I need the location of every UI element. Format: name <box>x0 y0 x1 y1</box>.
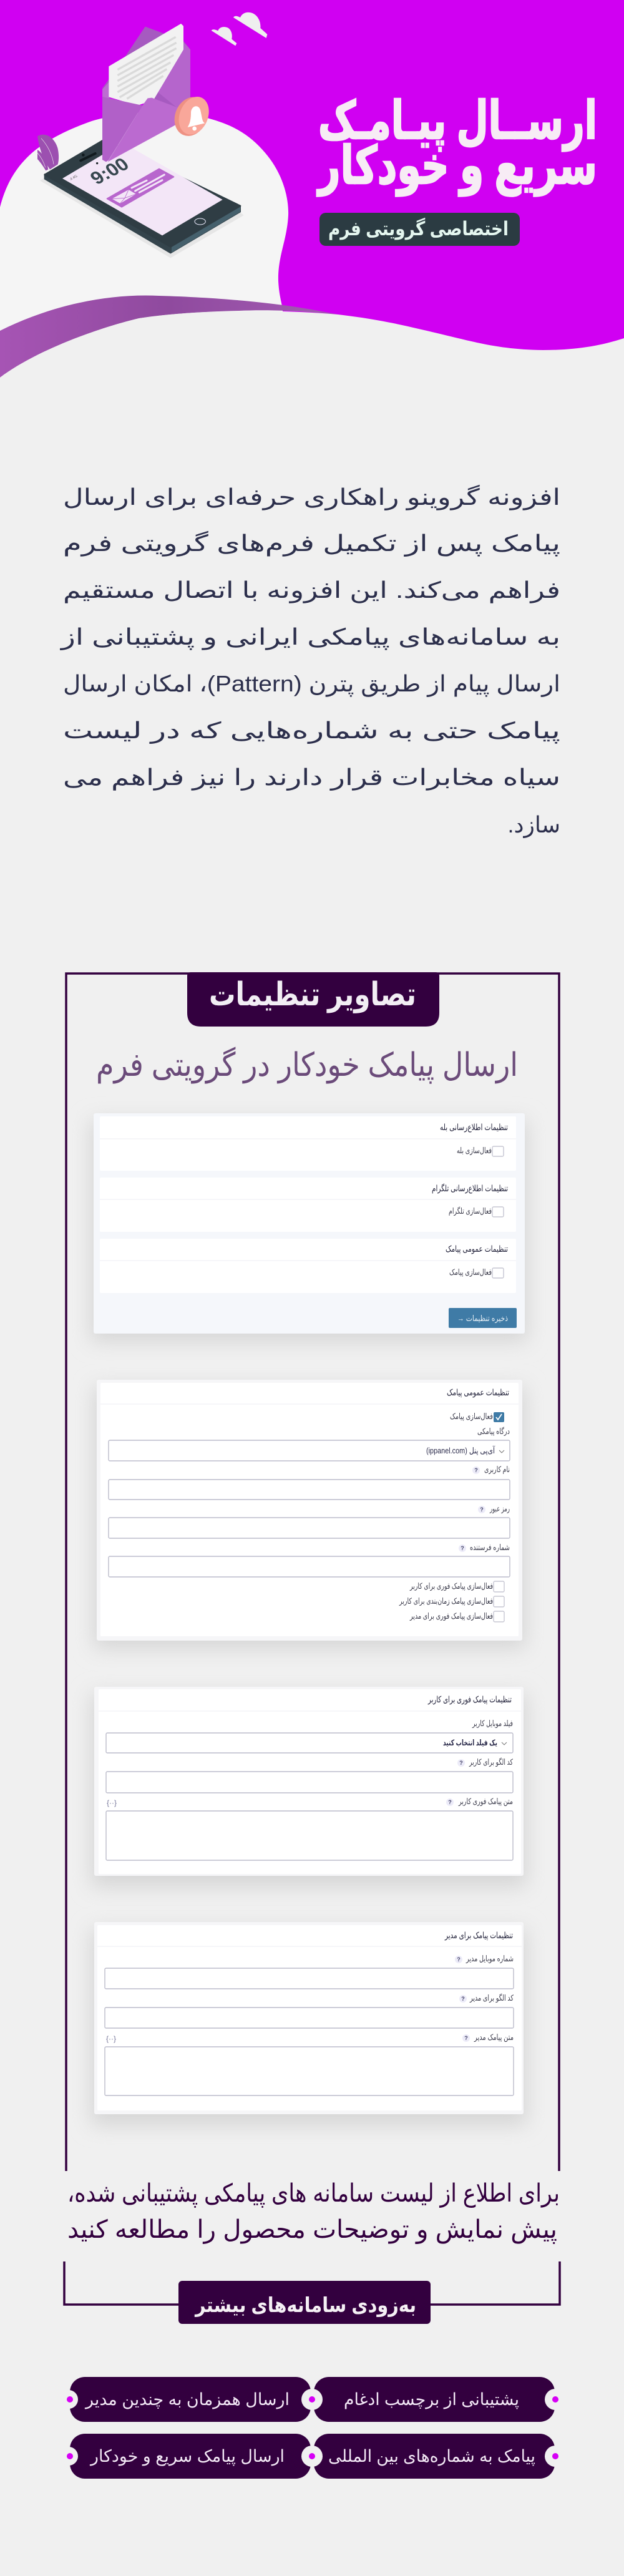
field: username: ? <box>474 1467 478 1473</box>
call to action text <box>67 2180 560 2244</box>
card: general SMS: فعال‌سازی پیامک <box>449 1267 492 1277</box>
field: password <box>109 1504 510 1538</box>
intro paragraph: سازد. <box>507 812 560 838</box>
settings frame <box>64 973 560 2305</box>
field: admin mobile: شماره موبایل مدیر <box>466 1954 514 1964</box>
card: Telegram: فعال‌سازی تلگرام <box>449 1206 492 1216</box>
intro paragraph: فراهم می‌کند. این افزونه با اتصال مستقیم <box>63 577 560 603</box>
pill: merge tags <box>314 2377 555 2422</box>
field: password: ? <box>480 1506 484 1513</box>
field: sender number: ? <box>461 1545 464 1551</box>
intro paragraph <box>59 484 560 838</box>
settings heading badge <box>187 972 439 1027</box>
badge: exclusive: اختصاصی گرویتی فرم <box>328 217 509 240</box>
envelope front <box>102 97 142 162</box>
card: Bale <box>100 1116 516 1171</box>
field: user message text: ? <box>448 1799 452 1805</box>
phone body <box>45 140 240 253</box>
gateway select: آی‌پی پنل (ippanel.com) <box>426 1445 495 1455</box>
call to action text: برای اطلاع از لیست سامانه های پیامکی پشتیبانی شده، <box>67 2180 560 2208</box>
field: username: نام کاربری <box>484 1465 510 1475</box>
icon: bell badge <box>169 92 214 141</box>
card: Telegram: تنظیمات اطلاع‌رسانی تلگرام <box>432 1183 508 1194</box>
intro paragraph: پیامک حتی به شماره‌هایی که در لیست <box>63 718 560 744</box>
intro paragraph: سیاه مخابرات قرار دارند را نیز فراهم می <box>63 764 560 791</box>
notification card <box>107 169 173 207</box>
intro paragraph: پیامک پس از تکمیل فرم‌های گرویتی فرم <box>63 530 560 557</box>
field: user pattern code: کد الگو برای کاربر <box>469 1757 514 1767</box>
settings subtitle: ارسال پیامک خودکار در گرویتی فرم <box>96 1046 518 1084</box>
screenshot: user instant SMS settings <box>91 1687 527 1887</box>
pill: multiple admins <box>70 2377 311 2422</box>
intro paragraph: ارسال پیام از طریق پترن (Pattern)، امکان ارسال <box>63 671 560 697</box>
field: admin mobile <box>105 1954 514 1989</box>
screenshot: notification settings <box>90 1113 527 1342</box>
field: password: رمز عبور <box>489 1504 510 1514</box>
field: sender number: شماره فرستنده <box>470 1543 510 1553</box>
badge: more gateways soon <box>178 2281 431 2324</box>
user field select <box>106 1733 513 1753</box>
gateway select <box>109 1440 510 1461</box>
field: user message text: متن پیامک فوری کاربر <box>458 1797 513 1807</box>
card: Bale: فعال‌سازی بله <box>457 1146 492 1156</box>
field: admin message text: ? <box>464 2035 468 2041</box>
card: general SMS: تنظیمات عمومی پیامک <box>446 1244 508 1254</box>
hero banner <box>0 0 624 437</box>
field: user pattern code <box>106 1757 514 1793</box>
icon: clouds <box>212 12 267 46</box>
screenshot: general SMS settings <box>94 1380 525 1649</box>
phone shadow <box>40 170 244 258</box>
field: admin message text: {··} <box>106 2034 116 2043</box>
lower wave <box>0 311 624 437</box>
field: user message text <box>106 1797 513 1860</box>
option checkboxes <box>399 1581 504 1622</box>
field: admin message text <box>105 2032 514 2095</box>
pill: international numbers: پیامک به شماره‌های بین المللی <box>328 2447 535 2466</box>
checked checkbox: فعال‌سازی پیامک <box>450 1412 493 1422</box>
feature pills <box>59 2377 566 2479</box>
purple wave band <box>0 295 338 378</box>
screenshot: user instant SMS settings: تنظیمات پیامک فوری برای کاربر <box>427 1694 512 1705</box>
phone screen <box>62 143 223 235</box>
icon: leaves <box>37 135 59 170</box>
title <box>316 91 597 197</box>
field: admin message text: متن پیامک مدیر <box>474 2032 514 2042</box>
pill: international numbers <box>314 2434 555 2479</box>
badge: exclusive <box>319 213 520 246</box>
screenshot: general SMS settings: تنظیمات عمومی پیامک <box>447 1387 509 1398</box>
intro paragraph: افزونه گروینو راهکاری حرفه‌ای برای ارسال <box>63 484 560 510</box>
field: admin mobile: ? <box>457 1956 461 1963</box>
field: admin pattern code: کد الگو برای مدیر <box>469 1993 514 2003</box>
field: admin pattern code: ? <box>461 1996 465 2002</box>
pill: fast automatic sms: ارسال پیامک سریع و خودکار <box>89 2447 285 2466</box>
phone time: 9:00 <box>86 154 133 188</box>
screenshot: general SMS settings: درگاه پیامکی <box>477 1427 510 1437</box>
screenshot: user instant SMS settings: فیلد موبایل کاربر <box>472 1719 513 1729</box>
paper <box>109 24 183 105</box>
option checkboxes: فعال‌سازی پیامک فوری برای کاربر <box>409 1581 493 1591</box>
white blob <box>0 112 288 387</box>
pill: merge tags: پشتیبانی از برچسب ادغام <box>344 2390 519 2409</box>
field: user message text: {··} <box>107 1798 117 1807</box>
settings heading badge: تصاویر تنظیمات <box>209 977 416 1013</box>
intro paragraph: به سامانه‌های پیامکی ایرانی و پشتیبانی از <box>59 624 560 650</box>
screenshot: admin SMS settings: تنظیمات پیامک برای مدیر <box>444 1930 513 1941</box>
card: general SMS <box>100 1239 516 1293</box>
field: sender number <box>109 1543 510 1577</box>
option checkboxes: فعال‌سازی پیامک زمان‌بندی برای کاربر <box>399 1596 493 1606</box>
option checkboxes: فعال‌سازی پیامک فوری برای مدیر <box>409 1611 493 1621</box>
status icon: .ıl 4G <box>69 175 79 182</box>
card: Bale: تنظیمات اطلاع‌رسانی بله <box>440 1122 508 1133</box>
save button: ذخیره تنظیمات → <box>457 1314 508 1324</box>
field: username <box>109 1465 510 1500</box>
call to action text: پیش نمایش و توضیحات محصول را مطالعه کنید <box>67 2216 557 2244</box>
screenshot: admin SMS settings <box>91 1922 527 2125</box>
card: Telegram <box>100 1178 516 1232</box>
badge: more gateways soon: به‌زودی سامانه‌های بیشتر <box>194 2293 416 2318</box>
pill: fast automatic sms <box>70 2434 311 2479</box>
user field select: یک فیلد انتخاب کنید <box>443 1738 497 1747</box>
illustration: phone with envelope <box>37 12 267 258</box>
pill: multiple admins: ارسال همزمان به چندین مدیر <box>84 2390 290 2409</box>
envelope <box>102 24 190 162</box>
phone speaker and button <box>80 154 95 160</box>
field: admin pattern code <box>105 1993 514 2028</box>
field: user pattern code: ? <box>459 1760 463 1766</box>
save button <box>449 1308 517 1328</box>
pill notches and dots <box>59 2389 566 2467</box>
